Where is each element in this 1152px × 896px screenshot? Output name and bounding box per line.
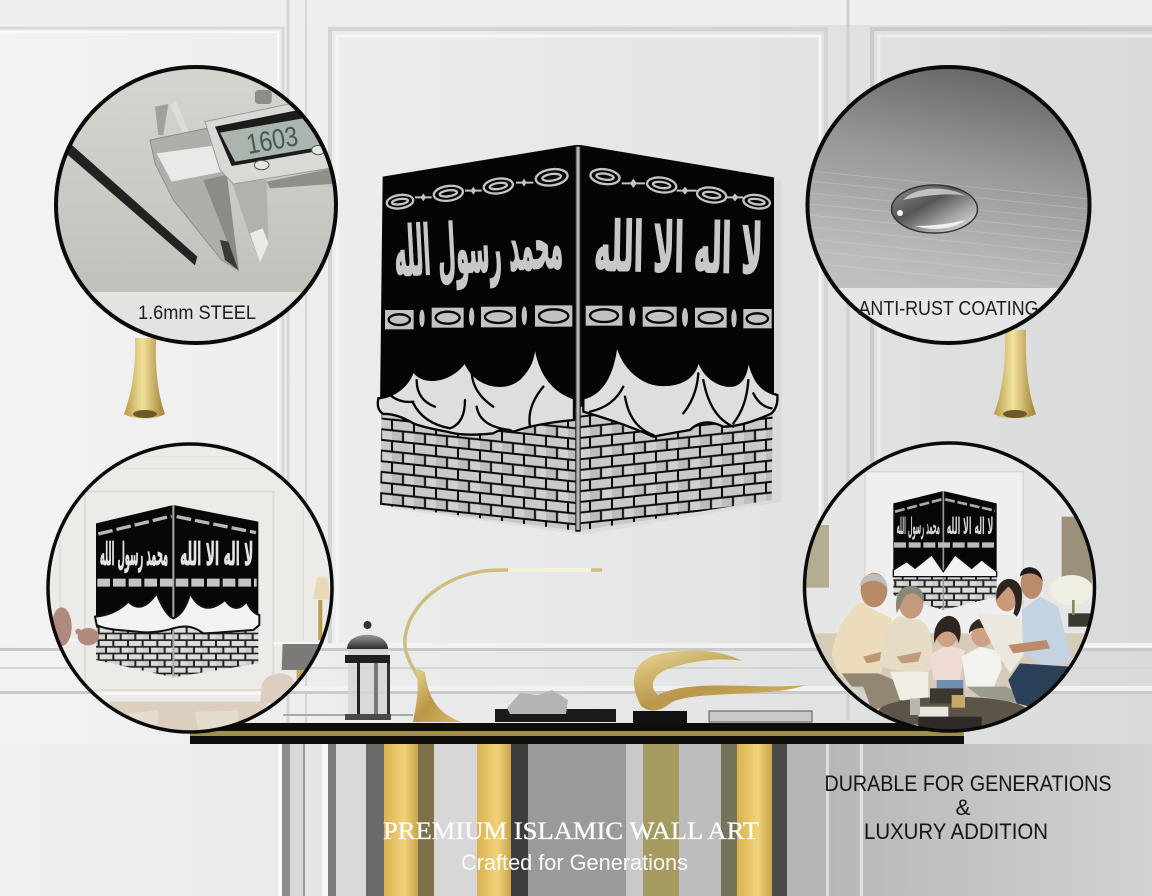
soft shadow xyxy=(390,150,782,535)
flowers xyxy=(1050,575,1093,627)
photo circle: family portrait: لا اله الا الله xyxy=(947,512,993,540)
coffee table xyxy=(878,688,1028,730)
caliper body xyxy=(150,90,340,270)
steel sheet edge xyxy=(66,145,197,265)
chain band right xyxy=(589,167,771,210)
caption band xyxy=(90,292,302,341)
sofa xyxy=(813,633,1087,700)
water droplet xyxy=(892,185,978,233)
text block: durable for generations and luxury addition xyxy=(824,771,1112,844)
table legs xyxy=(366,744,787,896)
girl xyxy=(930,616,965,688)
mini kaaba xyxy=(95,505,259,677)
photo circle: anti-rust coating xyxy=(800,67,1100,353)
pink flowers xyxy=(52,607,99,646)
grandfather xyxy=(832,573,908,710)
mini kaaba: محمد رسول الله xyxy=(100,537,168,573)
infographic canvas: لا اله الا الله xyxy=(594,208,763,290)
stacked books xyxy=(709,711,812,722)
black cloth left xyxy=(380,145,575,407)
father xyxy=(1008,567,1072,707)
sofa cushions xyxy=(128,710,238,730)
table top xyxy=(190,723,964,744)
ring xyxy=(48,444,332,732)
gold arc lamp xyxy=(405,568,602,722)
kaaba metal wall art xyxy=(378,145,782,535)
title: premium islamic wall art: PREMIUM ISLAMIC WALL ART xyxy=(383,818,759,845)
ornament band right xyxy=(586,306,772,328)
black cloth right xyxy=(581,145,774,407)
ring xyxy=(56,67,336,343)
crystal ornament on books xyxy=(495,690,616,722)
caliper reading: 1603 xyxy=(244,120,300,160)
centre seam xyxy=(575,145,581,532)
grandmother xyxy=(879,586,932,700)
caption: ANTI-RUST COATING xyxy=(858,297,1038,320)
kaaba metal wall art: محمد رسول الله xyxy=(392,205,564,293)
photo circle: family portrait xyxy=(800,440,1100,740)
photo circle: living room: لا اله الا الله xyxy=(180,537,253,573)
caption: 1.6mm STEEL xyxy=(138,302,256,324)
wall lamp xyxy=(313,577,331,640)
wall sconce left xyxy=(124,338,165,418)
ornament band left xyxy=(385,305,572,329)
console table xyxy=(190,723,964,896)
armchair xyxy=(260,673,294,703)
photo circle: caliper 1.6mm steel xyxy=(54,65,338,345)
room background xyxy=(806,471,1092,726)
brickwork left xyxy=(380,407,575,531)
table lamp xyxy=(282,644,319,683)
text block: durable for generations and luxury addition: LUXURY ADDITION xyxy=(864,819,1048,844)
photo circle: living room xyxy=(40,444,340,740)
sofa xyxy=(110,702,267,730)
brushed streaks xyxy=(810,171,1088,288)
boy xyxy=(962,618,1022,703)
caption band xyxy=(838,288,1058,341)
room mouldings xyxy=(60,456,320,694)
text block: durable for generations and luxury addition: & xyxy=(955,795,971,820)
mother xyxy=(977,579,1027,673)
wall sconce right xyxy=(994,330,1036,418)
brickwork right xyxy=(581,407,773,531)
drape left xyxy=(378,343,574,435)
text block: durable for generations and luxury addition: DURABLE FOR GENERATIONS xyxy=(824,771,1112,796)
coffee press xyxy=(283,621,413,720)
mini kaaba xyxy=(893,491,997,610)
mini kaaba: محمد رسول الله xyxy=(897,512,940,540)
ring xyxy=(804,443,1094,731)
gold sculpture xyxy=(633,651,806,724)
subtitle: crafted for generations: Crafted for Generations xyxy=(461,850,688,875)
chain band left xyxy=(386,167,569,210)
ring xyxy=(808,67,1090,343)
drape right xyxy=(583,343,777,437)
